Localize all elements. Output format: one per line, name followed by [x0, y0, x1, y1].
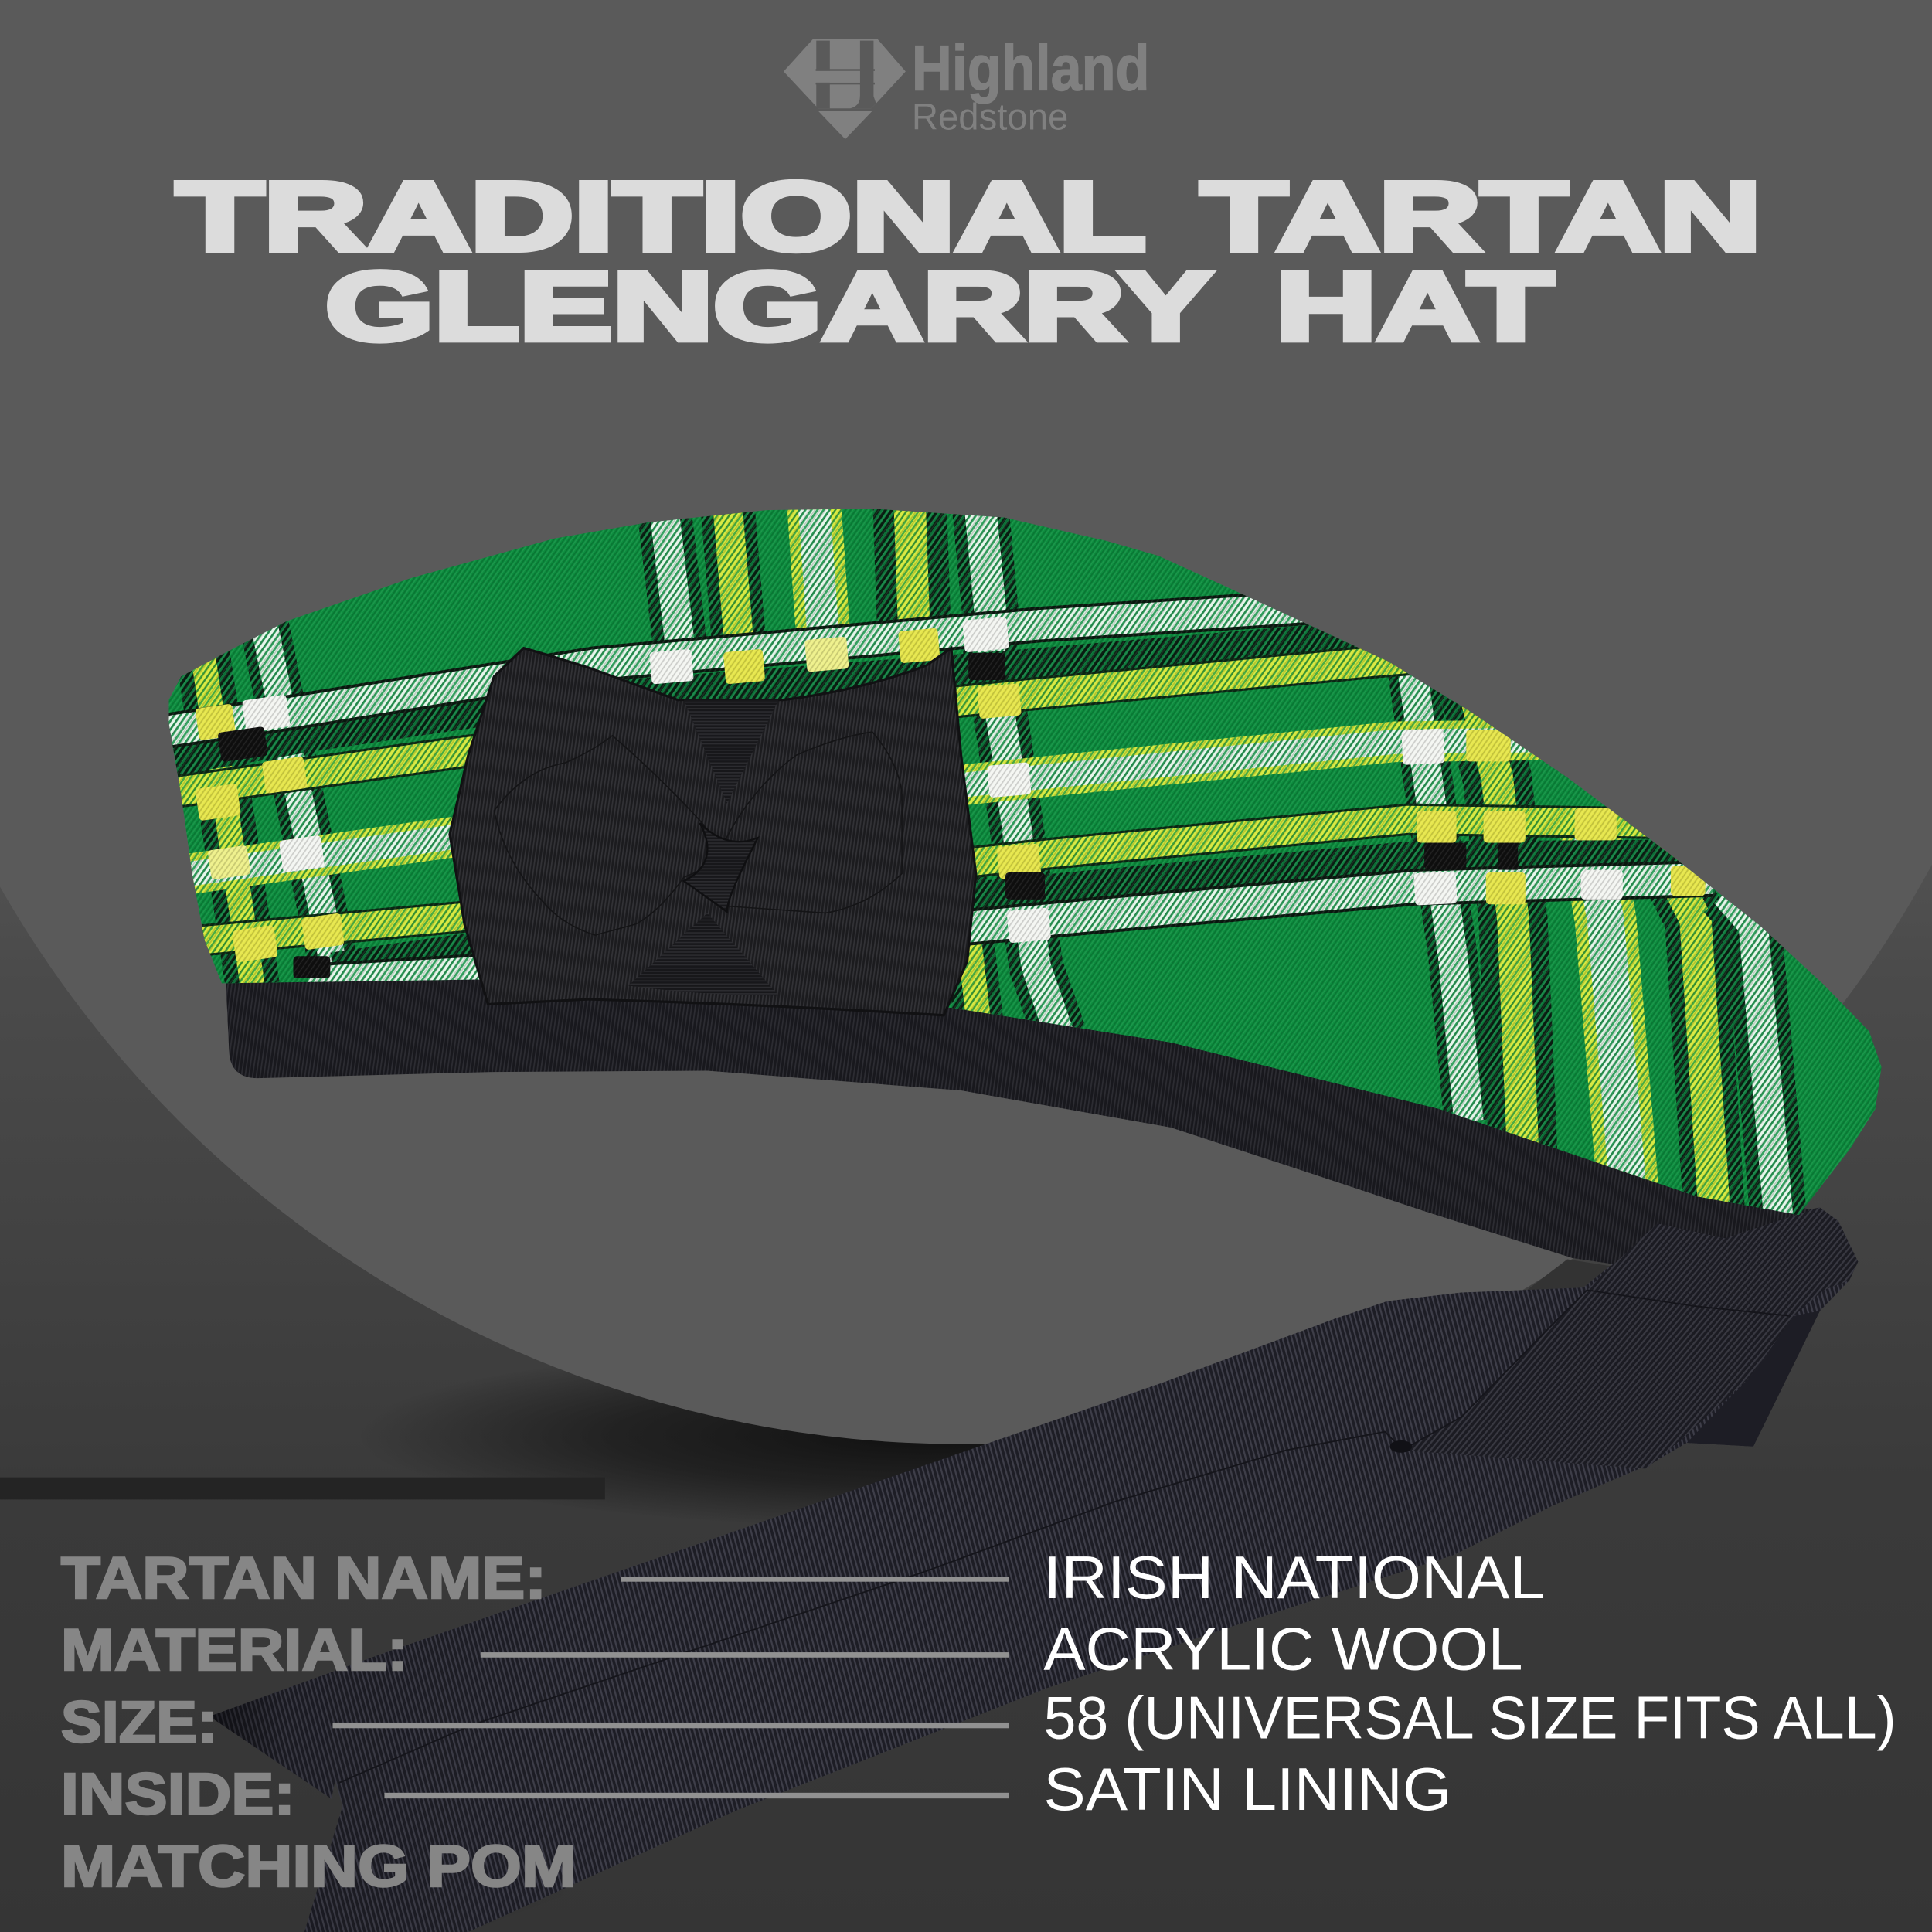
white crossings [242, 617, 1623, 943]
bow [450, 648, 976, 1015]
spec labels: INSIDE: [61, 1762, 295, 1828]
tip shading [209, 1590, 591, 1932]
circle shadow [357, 1343, 1491, 1528]
ribbon knot mark [1389, 1440, 1412, 1453]
logo icon: diamond [784, 39, 906, 139]
spec values: 58 (UNIVERSAL SIZE FITS ALL) [1043, 1684, 1896, 1752]
gap shadow behind ribbon [1526, 1259, 1614, 1291]
bow left petal [494, 736, 730, 935]
bow right petal [719, 732, 902, 913]
vertical stripes [201, 493, 1779, 1226]
spec labels: TARTAN NAME: [61, 1546, 546, 1611]
spec labels [61, 1546, 576, 1900]
title: HAT [1275, 252, 1554, 361]
ribbon seams [338, 1290, 1791, 1783]
logo wordmark: Highland [912, 32, 1150, 104]
title: TRADITIONAL [176, 162, 1146, 270]
bow body [450, 648, 976, 1015]
bow upper centre band [684, 700, 779, 804]
bow knot [684, 823, 758, 912]
yellow crossings [195, 628, 1706, 963]
spec values: ACRYLIC WOOL [1043, 1614, 1523, 1682]
tartan check crossings [195, 617, 1706, 978]
spec values [1043, 1543, 1896, 1823]
bow lower centre band [628, 913, 779, 995]
hat: tartan crown [135, 493, 1897, 1232]
connector lines [332, 1577, 1009, 1798]
twill texture [148, 493, 1897, 1232]
hat band [226, 968, 1811, 1264]
spec labels: MATCHING POM [61, 1834, 576, 1900]
ribbon knot end [1720, 1207, 1858, 1290]
logo subtitle: Redstone [912, 97, 1068, 138]
black crossings [217, 653, 1518, 978]
ribbon tails [209, 1207, 1858, 1932]
spec values: IRISH NATIONAL [1043, 1543, 1545, 1611]
title: GLENGARRY [325, 252, 1213, 361]
logo [784, 32, 1150, 139]
green base [148, 493, 1897, 1232]
spec labels: MATERIAL: [61, 1617, 409, 1683]
long ribbon tail [209, 1207, 1858, 1932]
spec values: SATIN LINING [1043, 1755, 1451, 1823]
divider bar [0, 1478, 605, 1499]
back ribbon piece [1687, 1311, 1820, 1447]
horizontal stripes [135, 603, 1750, 982]
title: TARTAN [1201, 162, 1761, 270]
title [176, 162, 1761, 361]
spec labels: SIZE: [61, 1689, 217, 1755]
ribbon fold [1402, 1223, 1824, 1469]
background circle [0, 0, 1932, 1444]
